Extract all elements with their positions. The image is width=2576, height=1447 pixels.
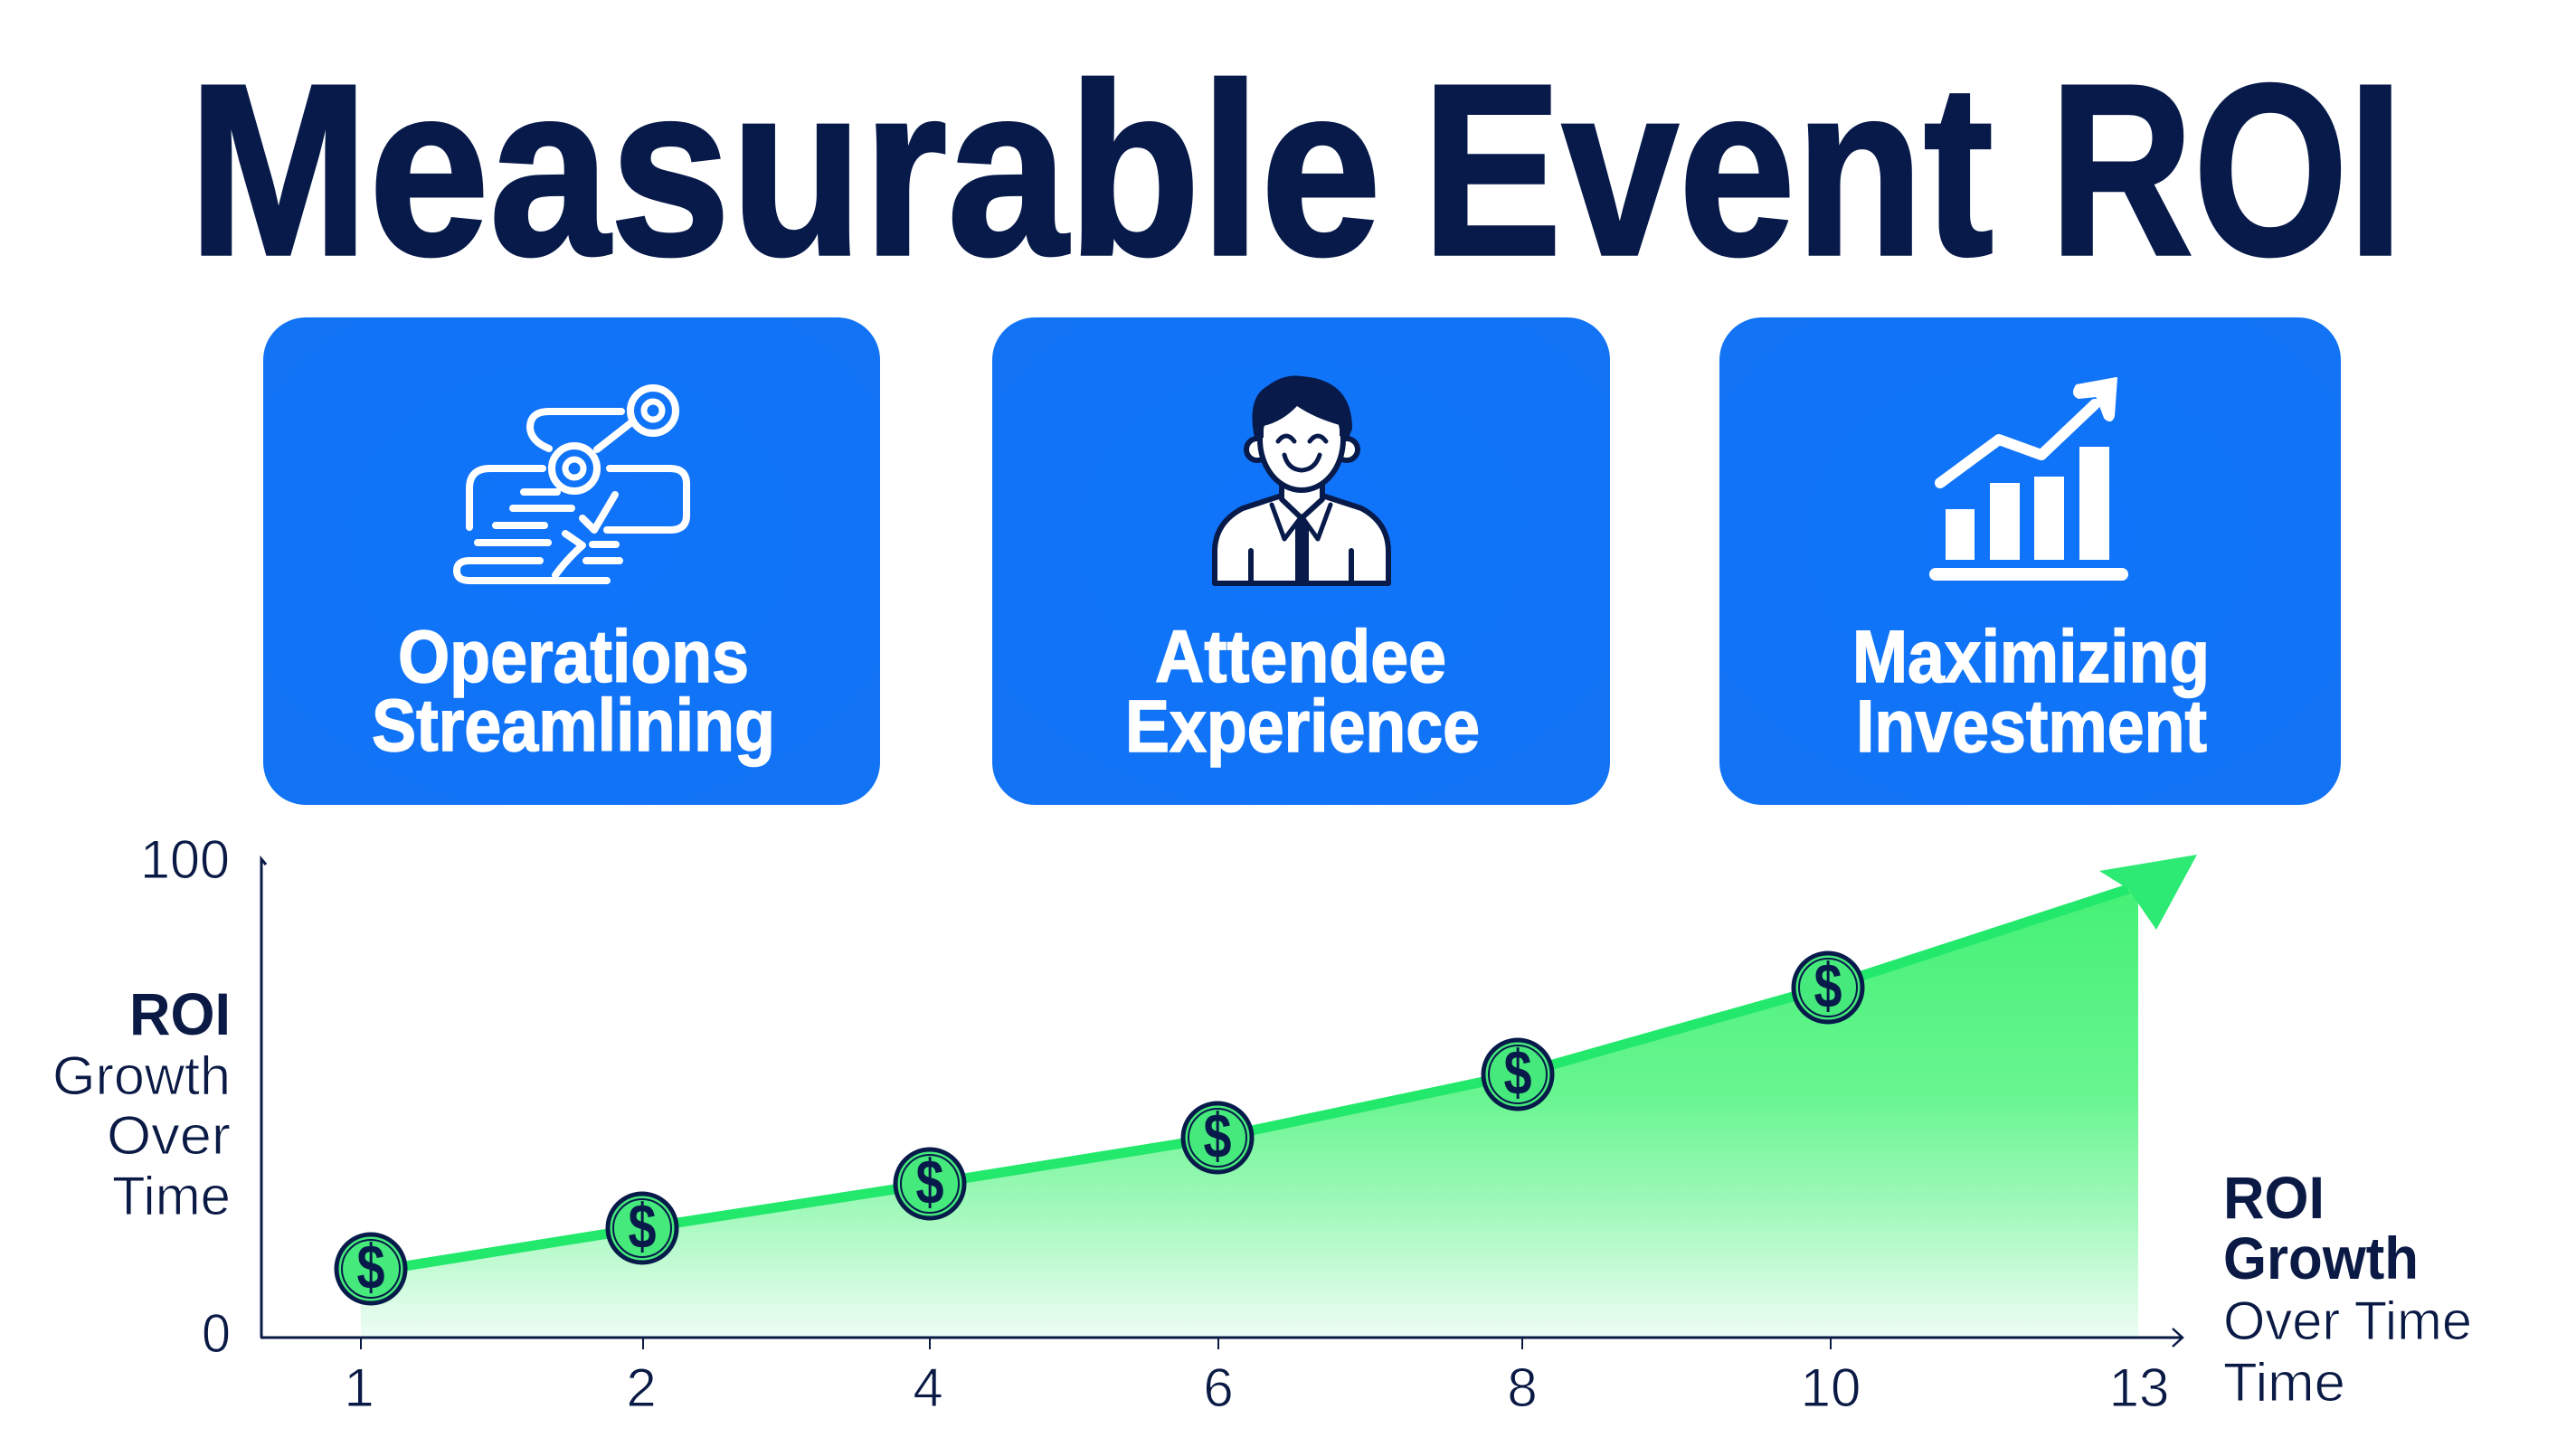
- x axis values: [344, 1357, 2169, 1418]
- x axis values: 8: [1507, 1357, 1538, 1418]
- title: Event: [1422, 34, 1994, 307]
- coin 5: [1483, 1037, 1552, 1109]
- card label: Maximizing: [1852, 616, 2210, 698]
- collar: [1272, 505, 1331, 539]
- panel: operations streamlining: [263, 317, 880, 805]
- x axis title: Time: [2223, 1352, 2345, 1413]
- arrow head: [2099, 855, 2197, 930]
- y axis title: Over: [107, 1105, 231, 1166]
- y axis values: [140, 829, 231, 1364]
- body: [1215, 496, 1388, 583]
- card label: Attendee: [1155, 616, 1446, 698]
- icon: smiling attendee: [1215, 375, 1388, 584]
- x axis title: [2223, 1164, 2472, 1413]
- coin 1: [336, 1232, 405, 1303]
- coin 5: $: [1503, 1037, 1532, 1108]
- x axis values: 2: [626, 1357, 657, 1418]
- hair: [1252, 375, 1352, 438]
- head: [1260, 389, 1343, 490]
- growth line: [371, 889, 2128, 1272]
- coin 3: [895, 1147, 964, 1218]
- x axis title: Growth: [2223, 1225, 2419, 1291]
- card label: Experience: [1125, 686, 1480, 768]
- title: [188, 34, 2403, 307]
- card label: [1125, 616, 1480, 768]
- coin 3: $: [915, 1147, 944, 1217]
- coin 6: [1794, 950, 1862, 1022]
- coin 4: [1183, 1101, 1252, 1172]
- coin 4: $: [1203, 1101, 1232, 1171]
- coin 2: [608, 1191, 677, 1263]
- card label: Streamlining: [372, 685, 775, 767]
- x axis title: ROI: [2223, 1164, 2325, 1231]
- card label: Investment: [1856, 686, 2207, 768]
- coin 1: $: [356, 1232, 385, 1302]
- x axis title: Over Time: [2223, 1291, 2472, 1351]
- card background: [263, 317, 880, 805]
- axes and ticks: [260, 859, 2183, 1349]
- tie: [1295, 516, 1309, 584]
- y axis title: Time: [112, 1166, 231, 1226]
- card background: [992, 317, 1610, 805]
- chart: ROI growth over time: [52, 829, 2472, 1418]
- x axis values: 1: [344, 1357, 374, 1418]
- coin 2: $: [628, 1191, 657, 1262]
- card label: [1852, 616, 2210, 768]
- coin 6: $: [1814, 950, 1842, 1021]
- y axis title: ROI: [129, 980, 231, 1047]
- title: ROI: [2050, 34, 2403, 307]
- y axis values: 100: [140, 829, 230, 890]
- panel: maximizing investment: [1719, 317, 2341, 805]
- x axis values: 4: [913, 1357, 943, 1418]
- card label: Operations: [398, 616, 749, 698]
- panel: attendee experience: [992, 317, 1610, 805]
- eyes and smile: [1278, 436, 1326, 470]
- icon: rising bar chart: [1929, 378, 2128, 581]
- x axis values: 6: [1203, 1357, 1234, 1418]
- icon: workflow gears and checklist: [457, 388, 687, 581]
- card background: [1719, 317, 2341, 805]
- y axis title: [52, 980, 231, 1226]
- y axis title: Growth: [52, 1045, 231, 1106]
- x axis values: 13: [2109, 1357, 2169, 1418]
- title: Measurable: [188, 34, 1381, 307]
- y axis values: 0: [202, 1303, 231, 1364]
- x axis values: 10: [1801, 1357, 1861, 1418]
- ears: [1246, 439, 1268, 460]
- area fill: [361, 890, 2138, 1338]
- card label: [372, 616, 775, 767]
